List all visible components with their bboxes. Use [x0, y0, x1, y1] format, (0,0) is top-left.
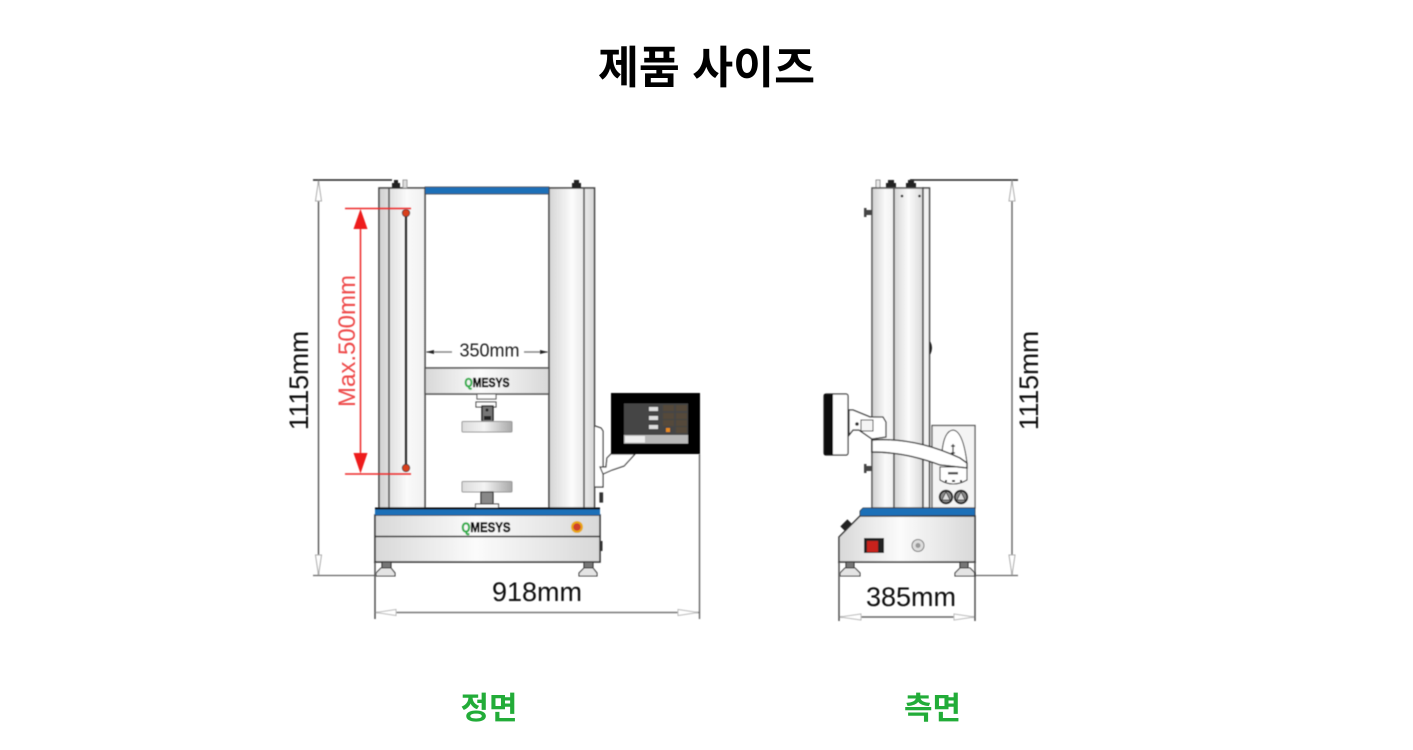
crosshead: QMESYS	[464, 376, 510, 390]
side width dimension	[839, 562, 975, 621]
left column	[379, 180, 425, 508]
label: 350mm: 350mm	[459, 340, 520, 360]
top knobs	[876, 180, 916, 188]
red travel dimension	[334, 208, 411, 474]
label: 1115mm: 1115mm	[284, 331, 314, 430]
inner width dimension	[426, 340, 548, 360]
top blue bar	[425, 187, 549, 194]
lower platen and grip	[462, 482, 512, 508]
front view machine	[375, 180, 700, 576]
display arm	[849, 410, 967, 468]
label: Max.500mm: Max.500mm	[334, 275, 361, 407]
front height dimension	[284, 180, 392, 576]
caption: side view: 측면	[904, 691, 961, 726]
rear control box	[932, 426, 975, 508]
side height dimension	[910, 180, 1044, 576]
label: 385mm: 385mm	[866, 582, 956, 612]
feet	[376, 562, 597, 576]
crosshead	[425, 368, 549, 394]
base: QMESYS	[462, 519, 510, 535]
arm bracket	[595, 426, 635, 502]
label: 1115mm: 1115mm	[1014, 331, 1044, 430]
base	[375, 508, 602, 562]
side base	[839, 508, 975, 562]
title: 제품 사이즈	[598, 44, 815, 93]
label: 918mm: 918mm	[492, 577, 582, 607]
side display	[824, 394, 848, 455]
limit rod	[402, 209, 410, 472]
column	[864, 188, 932, 508]
front width dimension	[375, 454, 700, 619]
caption: front view: 정면	[460, 691, 518, 726]
touchscreen	[611, 393, 700, 454]
side view machine	[824, 180, 975, 576]
right column	[549, 180, 594, 508]
side feet	[840, 562, 975, 576]
upper grip and platen	[462, 394, 512, 432]
